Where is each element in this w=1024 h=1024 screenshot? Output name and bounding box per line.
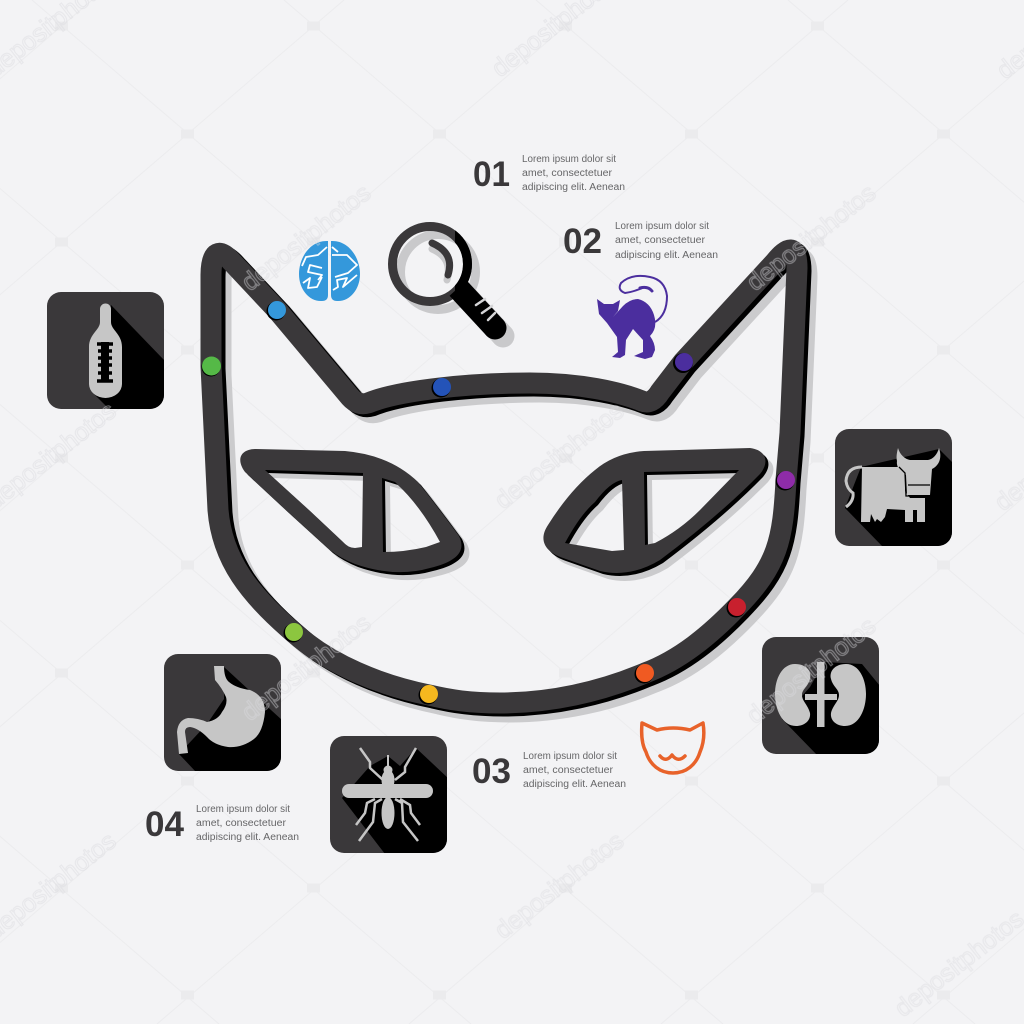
step 04 label: adipiscing elit. Aenean bbox=[196, 832, 299, 843]
tile: kidneys bbox=[762, 637, 880, 755]
tile: mosquito bbox=[330, 736, 448, 854]
step 02 label: Lorem ipsum dolor sit bbox=[615, 221, 709, 232]
watermark text: depositphotos bbox=[489, 397, 629, 515]
step 03 label: adipiscing elit. Aenean bbox=[523, 779, 626, 790]
step 03 label bbox=[472, 751, 626, 791]
watermark text: depositphotos bbox=[236, 179, 376, 297]
step 03 label: amet, consectetuer bbox=[523, 765, 614, 776]
step 02 label: adipiscing elit. Aenean bbox=[615, 250, 718, 261]
step 01 label: adipiscing elit. Aenean bbox=[522, 182, 625, 193]
step 03 label: Lorem ipsum dolor sit bbox=[523, 751, 617, 762]
step 01 label: Lorem ipsum dolor sit bbox=[522, 154, 616, 165]
step 01 label: 01 bbox=[473, 155, 510, 194]
watermark text: depositphotos bbox=[236, 609, 376, 727]
timeline coloured markers bbox=[202, 301, 795, 704]
right cat eye bbox=[543, 448, 773, 581]
icon: orange cat face outline bbox=[642, 723, 704, 773]
left cat eye bbox=[240, 449, 469, 580]
step 04 label: Lorem ipsum dolor sit bbox=[196, 804, 290, 815]
step 02 label: 02 bbox=[563, 222, 602, 261]
tile: stomach bbox=[164, 654, 282, 772]
step 02 label bbox=[563, 221, 718, 261]
step 04 label: 04 bbox=[145, 805, 185, 844]
tile: cow bbox=[835, 429, 953, 547]
step 04 label: amet, consectetuer bbox=[196, 818, 287, 829]
step 01 label bbox=[473, 154, 625, 194]
icon: magnifying glass bbox=[392, 226, 514, 348]
step 03 label: 03 bbox=[472, 752, 511, 791]
icon: arched black cat bbox=[597, 276, 667, 359]
watermark text: depositphotos bbox=[741, 179, 881, 297]
step 04 label bbox=[145, 804, 299, 844]
tile: thermometer bbox=[47, 292, 164, 409]
step 02 label: amet, consectetuer bbox=[615, 235, 706, 246]
cat head timeline outline bbox=[211, 250, 807, 712]
watermark text: depositphotos bbox=[489, 827, 629, 945]
watermark text: depositphotos bbox=[741, 612, 881, 730]
icon: brain bbox=[299, 241, 360, 301]
step 01 label: amet, consectetuer bbox=[522, 168, 613, 179]
